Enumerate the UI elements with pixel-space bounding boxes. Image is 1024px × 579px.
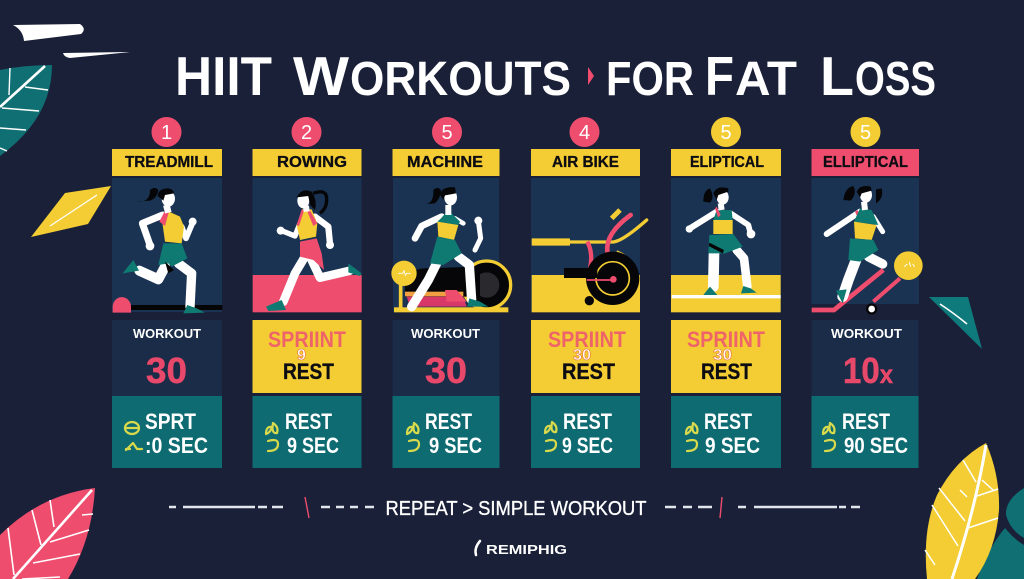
- title: OSS: [855, 53, 936, 106]
- stat: workout 30: WORKOUT: [133, 327, 201, 341]
- stat: workout 30: WORKOUT: [411, 327, 480, 341]
- stat: sprint rest: REST: [701, 359, 752, 384]
- panel: air bike: [531, 117, 647, 468]
- decoration: yellow leaf: [31, 186, 111, 237]
- illustration: athlete on incline elliptical: [812, 186, 923, 315]
- stat: rest 90 sec: [812, 396, 918, 468]
- stat: rest 9 sec: REST: [285, 409, 332, 434]
- step badge 1: 1: [161, 122, 172, 144]
- header: eliptical: [671, 149, 781, 176]
- header: eliptical: ELIPTICAL: [690, 154, 764, 171]
- decoration: red leaf: [0, 488, 95, 579]
- stat: sprint rest: SPRIINT: [548, 327, 626, 352]
- stat: workout 30: [392, 320, 500, 396]
- brand mark: [476, 541, 567, 557]
- stat: workout 10x: WORKOUT: [831, 327, 902, 341]
- title: HIIT: [175, 45, 272, 107]
- step badge 2: [292, 117, 322, 147]
- header: elliptical: [812, 149, 919, 176]
- header: elliptical: ELLIPTICAL: [823, 154, 908, 171]
- stat: rest 9 sec: 9 SEC: [429, 433, 482, 458]
- panel: machine: [391, 117, 511, 468]
- step badge 5: 5: [860, 122, 871, 144]
- title: FOR: [606, 53, 694, 106]
- stat: sprint 30 sec: [112, 396, 222, 468]
- stat: rest 9 sec: 9 SEC: [287, 433, 339, 458]
- stat: sprint rest: 30: [573, 347, 591, 364]
- header: air bike: [531, 149, 640, 176]
- stat: sprint rest: SPRIINT: [687, 327, 765, 352]
- title: W: [293, 45, 349, 107]
- header: machine: [392, 149, 500, 176]
- decoration: small teal leaf: [929, 297, 982, 349]
- stat: workout 30: 30: [425, 350, 467, 391]
- stat: rest 9 sec: REST: [563, 409, 612, 434]
- header: treadmill: TREADMILL: [125, 154, 213, 171]
- step badge 5: [432, 117, 462, 147]
- step badge 5: 5: [441, 122, 453, 144]
- decoration: large yellow leaf: [925, 443, 999, 579]
- stat: rest 9 sec: REST: [425, 409, 472, 434]
- stat: rest 9 sec: REST: [704, 409, 752, 434]
- stat: sprint 30 sec: :0 SEC: [145, 433, 208, 458]
- decoration: teal leaf: [0, 65, 52, 156]
- stat: rest 90 sec: REST: [842, 409, 890, 434]
- header: rowing: [252, 149, 362, 176]
- decoration: teal shapes bottom right: [977, 488, 1024, 579]
- decoration: white brush strokes: [13, 24, 130, 58]
- step badge 4: 4: [579, 122, 590, 144]
- stat: sprint 30 sec: SPRT: [145, 409, 196, 434]
- title: L: [820, 45, 854, 107]
- title: ORKOUTS: [350, 53, 571, 106]
- stat: sprint rest: [252, 320, 362, 393]
- stat: workout 10x: 10x: [843, 350, 893, 391]
- header: air bike: AIR BIKE: [552, 154, 619, 171]
- step badge 1: [152, 117, 182, 147]
- footer: repeat banner: [169, 497, 860, 520]
- step badge 4: [570, 117, 600, 147]
- illustration: air bike: [532, 210, 647, 312]
- stat: rest 9 sec: 9 SEC: [705, 433, 760, 458]
- illustration: runner on cross trainer: [391, 187, 511, 312]
- step badge 2: 2: [301, 122, 312, 144]
- stat: sprint rest: REST: [283, 359, 334, 384]
- step badge 5: 5: [720, 122, 732, 144]
- panel: eliptical: [671, 117, 781, 468]
- stat: sprint rest: SPRIINT: [268, 327, 346, 352]
- stat: workout 10x: [812, 320, 918, 396]
- title: F: [705, 45, 734, 107]
- stat: workout 30: 30: [146, 350, 187, 391]
- title: [175, 45, 936, 107]
- header: rowing: ROWING: [277, 154, 347, 171]
- illustration: runner on treadmill: [113, 188, 222, 313]
- illustration: runner on red floor: [253, 190, 362, 312]
- brand mark: REMIPHIG: [486, 542, 567, 557]
- panel: rowing: [252, 117, 362, 468]
- step badge 5: [850, 117, 880, 147]
- stat: sprint rest: REST: [562, 359, 615, 384]
- stat: sprint rest: 9: [297, 347, 306, 364]
- illustration: athlete standing wide: [671, 187, 781, 312]
- stat: rest 9 sec: [531, 396, 640, 468]
- stat: rest 90 sec: 90 SEC: [844, 433, 908, 458]
- panel: elliptical: [812, 117, 923, 468]
- stat: sprint rest: 30: [713, 347, 732, 364]
- stat: sprint rest: [671, 320, 781, 393]
- stat: rest 9 sec: [252, 396, 362, 468]
- header: machine: MACHINE: [407, 154, 483, 171]
- stat: rest 9 sec: 9 SEC: [562, 433, 613, 458]
- title: AT: [735, 53, 797, 106]
- stat: workout 30: [112, 320, 222, 396]
- stat: rest 9 sec: [671, 396, 781, 468]
- header: treadmill: [112, 149, 222, 176]
- step badge 5: [711, 117, 741, 147]
- footer: repeat banner: REPEAT > SIMPLE WORKOUT: [386, 498, 646, 520]
- stat: rest 9 sec: [392, 396, 500, 468]
- stat: sprint rest: [531, 320, 640, 393]
- panel: treadmill: [112, 117, 222, 468]
